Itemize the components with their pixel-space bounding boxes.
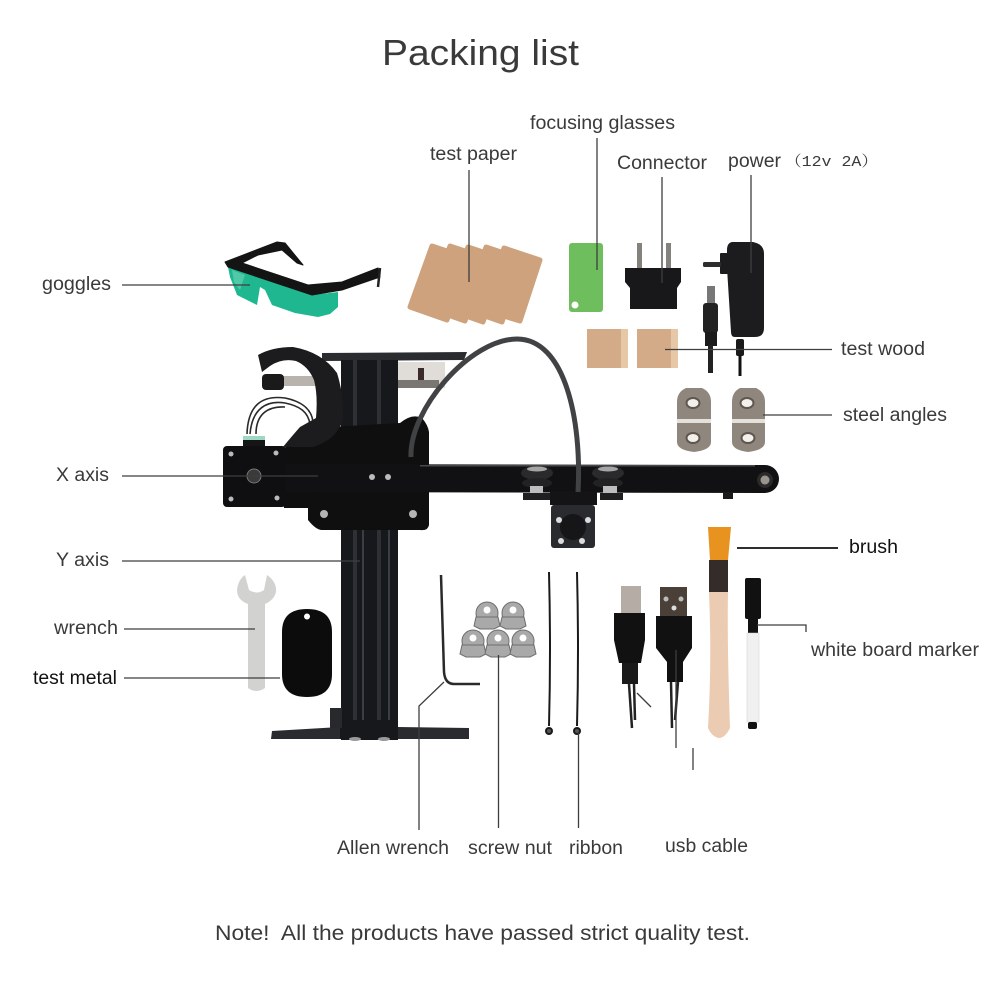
base foot (271, 708, 469, 741)
icon: brush (708, 527, 731, 738)
top plate (322, 352, 467, 361)
label leader lines (122, 138, 838, 830)
label: X axis: X axis (56, 465, 109, 486)
icon: steel angles (677, 388, 765, 452)
label: steel angles: steel angles (843, 405, 947, 426)
label: brush: brush (849, 537, 898, 558)
icon: test metal tag (282, 609, 332, 697)
label: white board marker: white board marker (810, 640, 980, 661)
label: power: power (728, 151, 782, 172)
label: test metal: test metal (33, 668, 117, 689)
label: goggles: goggles (42, 274, 111, 295)
icon: usb A cable (656, 587, 692, 728)
icon: power adapter (703, 242, 764, 376)
label: wrench: wrench (53, 618, 118, 639)
label: usb cable: usb cable (665, 836, 748, 857)
velcro strap (258, 347, 343, 447)
stepper motor (223, 436, 286, 507)
icon: goggles (225, 242, 380, 317)
icon: usb B cable (614, 586, 645, 728)
label: Allen wrench: Allen wrench (337, 838, 449, 859)
icon: test wood blocks (587, 329, 678, 368)
note text: Note! All the products have passed strict quality test. (215, 922, 750, 945)
title: Packing list (382, 32, 579, 73)
label: Y axis: Y axis (56, 550, 109, 571)
machine: laser engraver frame (223, 339, 779, 741)
label: test wood: test wood (841, 339, 925, 360)
Y axis rail (341, 360, 398, 740)
icon: white board marker (745, 578, 761, 729)
label: power rating: （12v 2A） (785, 153, 878, 171)
labels (33, 113, 980, 859)
laser carriage wheels (521, 466, 624, 505)
icon: wrench (237, 575, 276, 691)
laser head fan (551, 505, 595, 548)
icon: connector plug (625, 243, 681, 309)
motor wires (247, 397, 313, 434)
label: ribbon: ribbon (569, 838, 623, 859)
icon: cable ties (546, 572, 580, 734)
icon: screw nuts (460, 602, 536, 657)
top rear mechanics (262, 362, 445, 390)
cable (411, 339, 579, 492)
label: test paper: test paper (430, 144, 518, 165)
carriage plate (284, 416, 429, 530)
icon: focusing glasses green card (569, 243, 603, 312)
X axis rail (286, 464, 779, 518)
icon: test paper cards (410, 246, 540, 322)
label: connector: Connector (617, 153, 708, 174)
icon: allen wrench (441, 575, 480, 684)
label: screw nut: screw nut (468, 838, 553, 859)
label: focusing glasses: focusing glasses (530, 113, 675, 134)
